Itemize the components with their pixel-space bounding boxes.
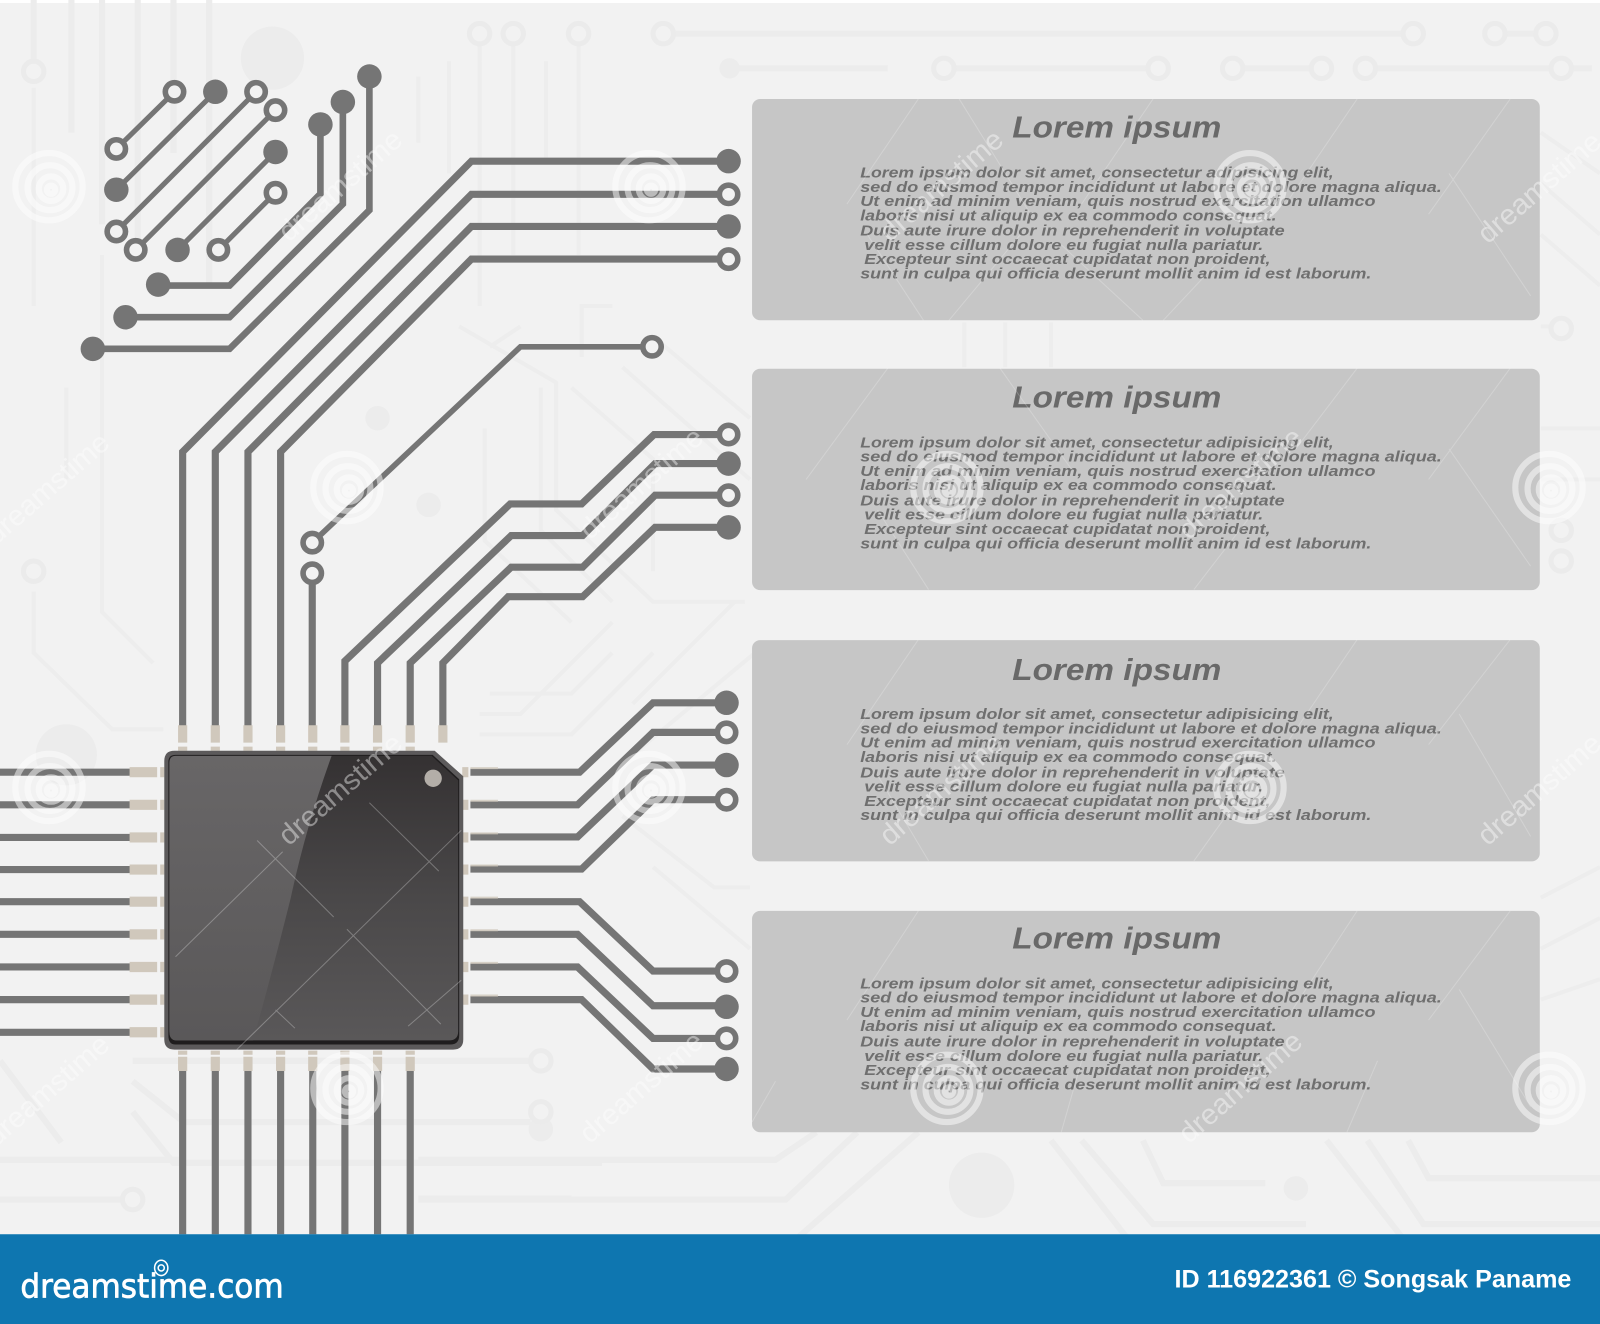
watermark overlay: dreamstime xyxy=(272,727,409,852)
watermark overlay: dreamstime xyxy=(873,727,1010,852)
footer credit: ID 116922361 © Songsak Paname xyxy=(1174,1265,1572,1293)
watermark overlay: dreamstime xyxy=(873,124,1010,248)
panel 2 body text: velit esse cillum dolore eu fugiat nulla pariatur. xyxy=(864,507,1263,524)
panel 2 body text: sed do eiusmod tempor incididunt ut labore et dolore magna aliqua. xyxy=(860,449,1442,466)
panel 2 body text: Ut enim ad minim veniam, quis nostrud exercitation ullamco xyxy=(860,463,1376,480)
panel 4 body text: laboris nisi ut aliquip ex ea commodo consequat. xyxy=(860,1018,1277,1035)
footer banner xyxy=(0,1234,1600,1324)
panel 1 body text: Duis aute irure dolor in reprehenderit in voluptate xyxy=(860,223,1285,240)
panel 3 body text: velit esse cillum dolore eu fugiat nulla pariatur. xyxy=(864,779,1263,796)
panel 3 body text: Excepteur sint occaecat cupidatat non proident, xyxy=(864,793,1270,810)
bottom traces xyxy=(183,1067,410,1234)
panel 3 body text: Ut enim ad minim veniam, quis nostrud exercitation ullamco xyxy=(860,735,1376,752)
traces to panel 4 xyxy=(470,902,739,1081)
left traces xyxy=(0,772,131,1032)
traces to panel 1 xyxy=(183,149,741,730)
watermark overlay: dreamstime xyxy=(1172,1025,1309,1150)
panel 2 heading: Lorem ipsum xyxy=(1012,381,1221,415)
panel 4 body text: velit esse cillum dolore eu fugiat nulla pariatur. xyxy=(864,1048,1263,1065)
panel 1 body text: laboris nisi ut aliquip ex ea commodo consequat. xyxy=(860,207,1277,224)
panel 2 xyxy=(752,369,1540,590)
panel 4 heading: Lorem ipsum xyxy=(1012,922,1221,956)
panel 1 xyxy=(752,99,1540,320)
chip marker dot xyxy=(424,770,442,787)
panel 3 xyxy=(752,640,1540,861)
footer logo: dreamstime.com xyxy=(20,1267,284,1305)
panel 3 body text: sed do eiusmod tempor incididunt ut labore et dolore magna aliqua. xyxy=(860,720,1442,737)
panel 3 body text xyxy=(860,706,1442,824)
panel 4 body text: Excepteur sint occaecat cupidatat non proident, xyxy=(864,1062,1270,1079)
watermark overlay: dreamstime xyxy=(573,1025,710,1150)
watermark overlay: dreamstime xyxy=(272,124,409,248)
panel 2 body text xyxy=(860,434,1442,552)
panel 1 body text: velit esse cillum dolore eu fugiat nulla pariatur. xyxy=(864,237,1263,254)
panel 4 body text: Duis aute irure dolor in reprehenderit in voluptate xyxy=(860,1034,1285,1051)
panel 2 body text: Excepteur sint occaecat cupidatat non proident, xyxy=(864,521,1270,538)
panel 1 body text: Excepteur sint occaecat cupidatat non proident, xyxy=(864,251,1270,268)
panel 4 body text: Ut enim ad minim veniam, quis nostrud exercitation ullamco xyxy=(860,1004,1376,1021)
watermark overlay: dreamstime xyxy=(1172,421,1309,546)
top-left trace cluster xyxy=(81,64,382,361)
watermark overlay: dreamstime xyxy=(573,421,710,546)
panel 1 body text: sed do eiusmod tempor incididunt ut labore et dolore magna aliqua. xyxy=(860,179,1442,196)
panel 3 body text: Duis aute irure dolor in reprehenderit in voluptate xyxy=(860,764,1285,781)
panel 2 body text: sunt in culpa qui officia deserunt mollit anim id est laborum. xyxy=(860,535,1371,552)
chip pins xyxy=(130,725,498,1071)
panel 4 body text xyxy=(860,975,1442,1093)
traces to panel 2 xyxy=(345,425,741,730)
isolated traces xyxy=(303,338,661,730)
panel 2 body text: laboris nisi ut aliquip ex ea commodo consequat. xyxy=(860,477,1277,494)
panel 3 body text: laboris nisi ut aliquip ex ea commodo consequat. xyxy=(860,749,1277,766)
panel 1 body text: sunt in culpa qui officia deserunt mollit anim id est laborum. xyxy=(860,265,1371,282)
panel 2 body text: Duis aute irure dolor in reprehenderit in voluptate xyxy=(860,492,1285,509)
traces to panel 3 xyxy=(470,691,739,869)
panel 1 body text: Lorem ipsum dolor sit amet, consectetur adipisicing elit, xyxy=(860,164,1334,181)
panel 4 body text: sed do eiusmod tempor incididunt ut labore et dolore magna aliqua. xyxy=(860,990,1442,1007)
panel 1 body text: Ut enim ad minim veniam, quis nostrud exercitation ullamco xyxy=(860,193,1376,210)
panel 2 body text: Lorem ipsum dolor sit amet, consectetur adipisicing elit, xyxy=(860,434,1334,451)
panel 3 body text: Lorem ipsum dolor sit amet, consectetur adipisicing elit, xyxy=(860,706,1334,723)
watermark overlay xyxy=(0,99,1600,1153)
panel 1 heading: Lorem ipsum xyxy=(1012,111,1221,145)
panel 4 body text: Lorem ipsum dolor sit amet, consectetur adipisicing elit, xyxy=(860,975,1334,992)
panel 3 heading: Lorem ipsum xyxy=(1012,653,1221,687)
microchip xyxy=(164,751,463,1050)
panel 4 xyxy=(752,911,1540,1132)
panel 4 body text: sunt in culpa qui officia deserunt mollit anim id est laborum. xyxy=(860,1076,1371,1093)
panel 1 body text xyxy=(860,164,1442,282)
panel 3 body text: sunt in culpa qui officia deserunt mollit anim id est laborum. xyxy=(860,807,1371,824)
